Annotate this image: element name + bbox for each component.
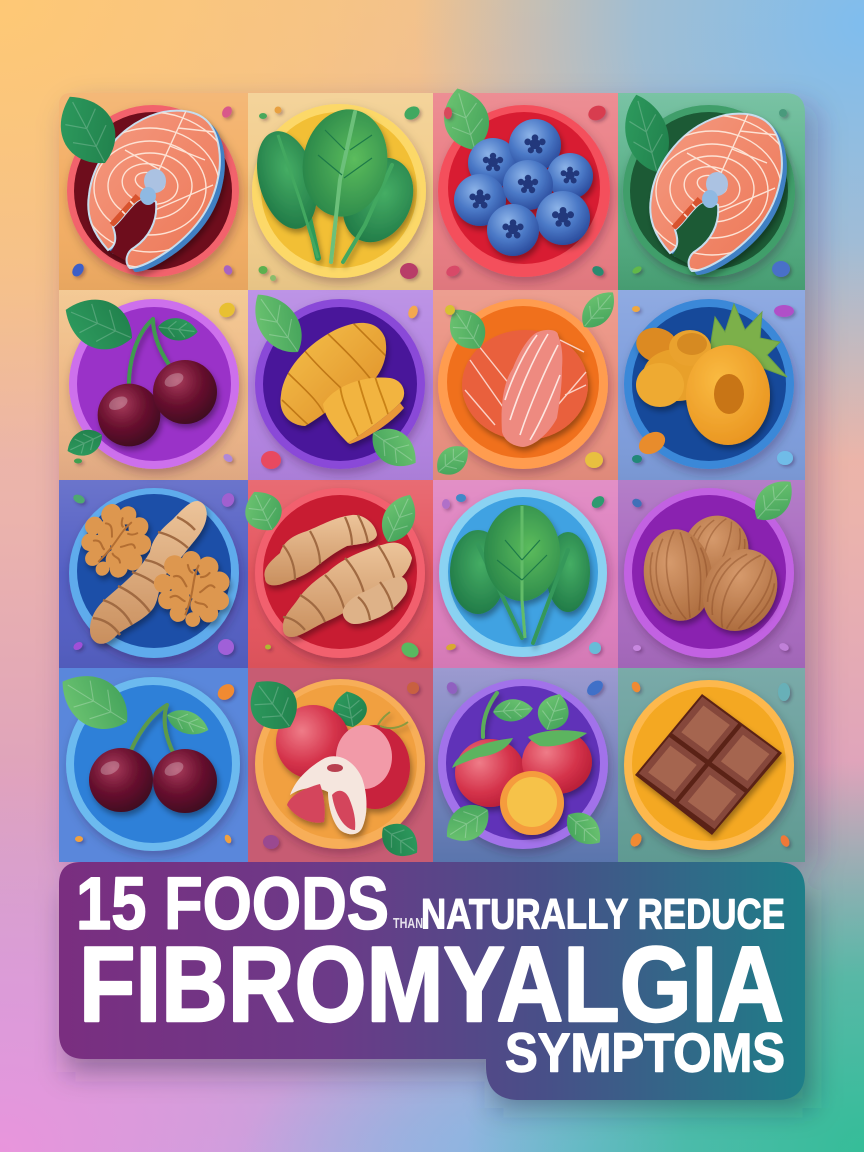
panel: salmon fillets on orange bowl <box>430 284 623 482</box>
icon: leaf <box>47 85 128 175</box>
icon: leaf <box>616 89 677 177</box>
icon: leaf <box>436 82 496 156</box>
icon: leaves <box>438 689 609 853</box>
title line: 15 foods: 15 FOODS <box>76 862 389 945</box>
bowl <box>252 104 426 278</box>
panel: almonds on purple bowl <box>624 472 802 658</box>
icon: pineapple pieces <box>632 323 770 445</box>
food grid <box>47 82 805 865</box>
title line: symptoms: SYMPTOMS <box>505 1022 785 1084</box>
icon: leaf <box>746 472 802 529</box>
icon: chocolate bar <box>635 694 782 835</box>
bowl <box>255 488 425 658</box>
bowl <box>66 677 240 851</box>
bowl <box>69 299 239 469</box>
panel: salmon steak on green bowl <box>616 89 798 277</box>
panel: red fruit on violet bowl <box>438 679 609 853</box>
icon: leaves <box>430 284 623 482</box>
panel: blueberries on red bowl <box>436 82 610 277</box>
bowl <box>624 680 794 850</box>
icon: leaves <box>238 668 426 865</box>
icon: cherries <box>98 319 217 446</box>
title small word: than: THAN <box>393 915 423 932</box>
icon: pineapple crown <box>710 304 787 377</box>
icon: cherries <box>89 705 217 813</box>
icon: leaves <box>238 484 424 548</box>
bowl <box>623 105 795 277</box>
icon: fruit and citrus slice <box>452 693 592 835</box>
icon: almonds <box>638 508 791 644</box>
panel: ginger on red bowl <box>238 484 425 658</box>
panel: pineapple on blue bowl <box>624 299 794 469</box>
panel: chocolate on yellow bowl <box>624 680 794 850</box>
icon: apples <box>276 705 410 834</box>
icon: salmon steak <box>64 111 236 272</box>
bowl <box>255 679 425 849</box>
bowl <box>69 488 239 658</box>
icon: leaves <box>50 661 212 742</box>
bowl <box>67 105 239 277</box>
icon: dark leaf behind <box>330 689 370 730</box>
bowl <box>438 105 610 277</box>
bowl <box>624 299 794 469</box>
icon: salmon fillets <box>462 330 588 447</box>
icon: leaves <box>56 288 199 462</box>
title panel <box>59 862 805 1100</box>
bowl <box>438 679 608 849</box>
panel: spinach on light blue bowl <box>439 489 607 657</box>
panel: mango on violet bowl <box>242 284 425 477</box>
panel: cherries on blue bowl <box>50 661 240 851</box>
panel: salmon steak on red bowl <box>47 85 239 277</box>
title line: naturally reduce: NATURALLY REDUCE <box>421 890 785 938</box>
title background <box>59 862 805 1100</box>
panel: ginger and walnuts on blue bowl <box>65 488 239 658</box>
grid background cells <box>59 93 805 862</box>
icon: ginger roots <box>264 515 412 637</box>
icon: blueberries <box>454 119 593 256</box>
icon: salmon steak <box>626 114 798 275</box>
grid drop shadow <box>66 104 818 1108</box>
panel: apples on orange bowl <box>238 668 426 865</box>
icon: spinach leaves <box>450 505 590 643</box>
icon: spinach leaves <box>247 103 427 262</box>
panel: spinach on yellow bowl <box>247 103 427 278</box>
bowl <box>255 299 425 469</box>
icon: mango pieces <box>280 320 404 444</box>
panel: cherries on purple bowl <box>56 288 239 469</box>
scattered beans <box>70 103 794 849</box>
icon: loose pineapple chunk <box>635 427 669 459</box>
icon: leaves <box>242 284 425 477</box>
bowl <box>439 489 607 657</box>
icon: ginger root and walnuts <box>65 490 239 644</box>
bowl <box>624 488 794 658</box>
bowl <box>438 299 608 469</box>
